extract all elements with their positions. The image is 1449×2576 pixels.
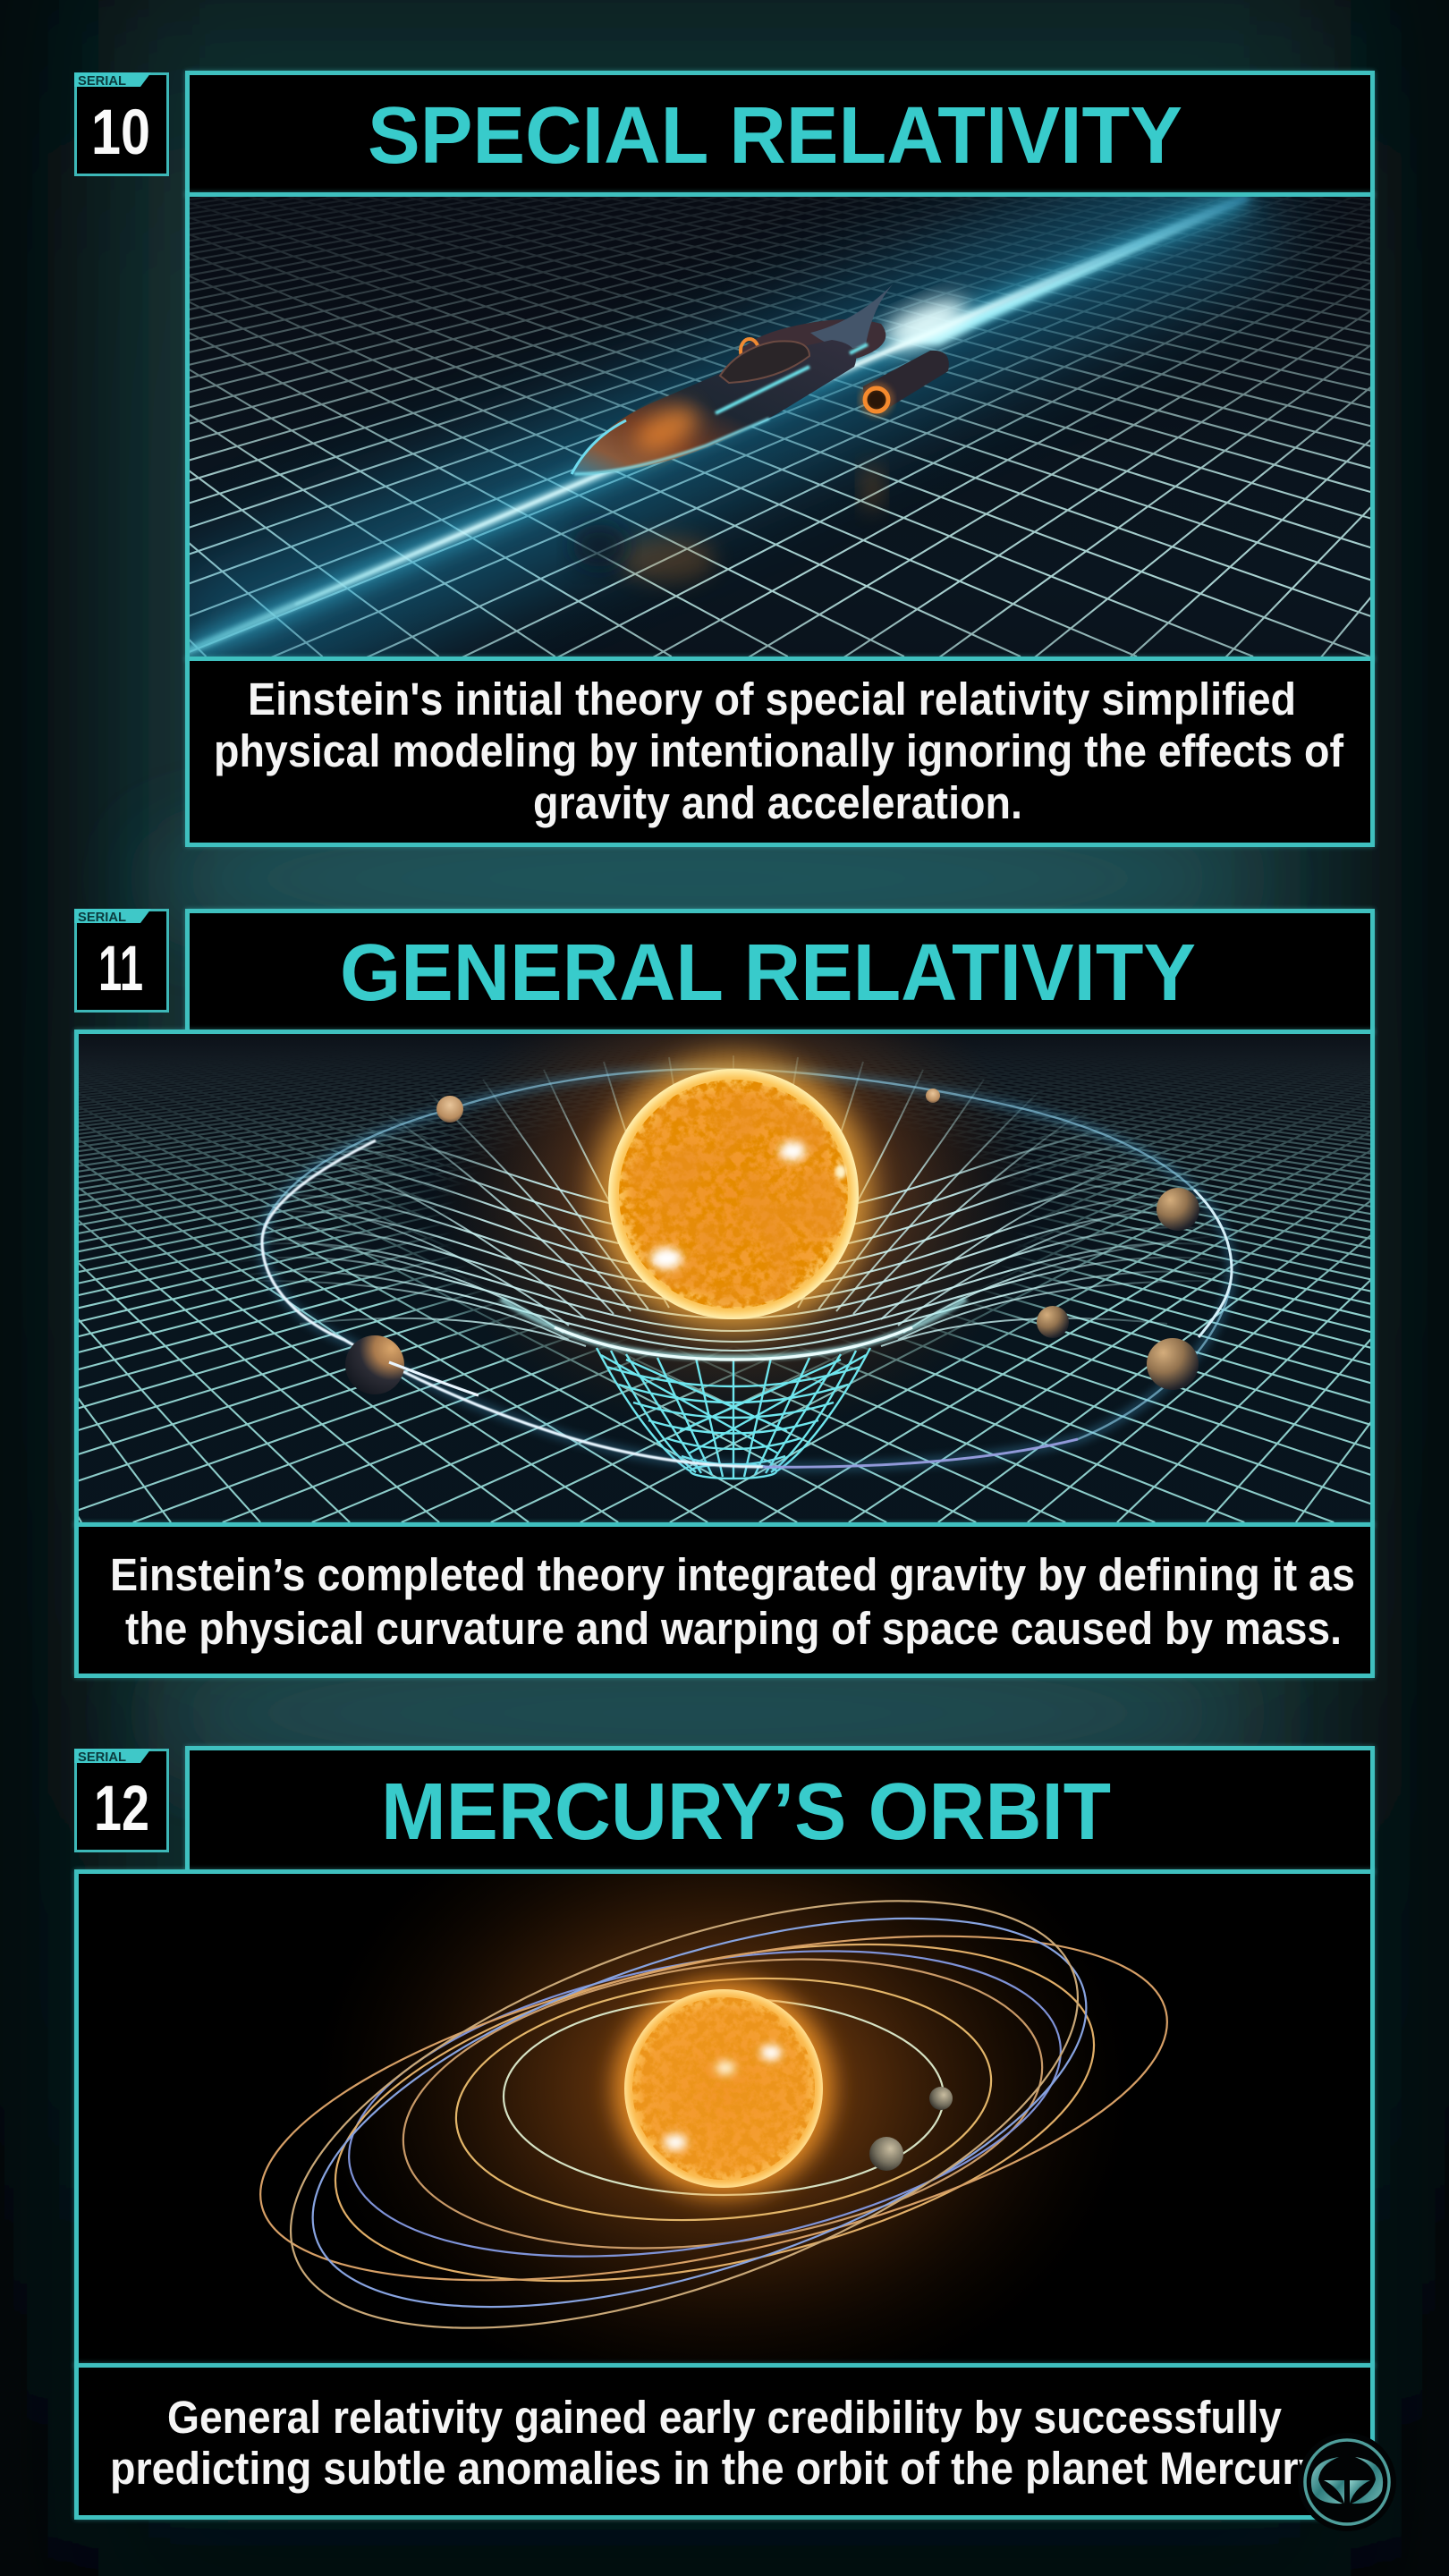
- illustration: spaceship on a grid: [185, 192, 1375, 661]
- serial badge 11: 11: [98, 934, 143, 1004]
- warm glow behind the sun: [429, 953, 1038, 1436]
- section 11: general relativity: [71, 906, 1378, 1681]
- nose glow: [628, 398, 705, 461]
- spaceship: [572, 284, 949, 474]
- cyan streak: [716, 344, 868, 413]
- orbit rings: [231, 1813, 1197, 2416]
- serial badge 11: [74, 909, 169, 1013]
- light beam, grid and ship: [190, 197, 1370, 657]
- funnel rim: [501, 1299, 966, 1358]
- beam: [183, 197, 1248, 653]
- serial badge 10: SERIAL: [78, 73, 126, 89]
- lower engine: [863, 351, 949, 410]
- planets: [345, 1089, 1199, 1395]
- heading: mercury's orbit: [185, 1746, 1375, 1874]
- upper pod: [741, 319, 886, 380]
- serial badge 10: [74, 72, 169, 176]
- heading: special relativity: [185, 71, 1375, 197]
- section 12: mercury's orbit: [71, 1743, 1378, 2522]
- caption: general relativity: [74, 1522, 1375, 1678]
- radial curves: [233, 1055, 1234, 1346]
- caption: special relativity: Einstein's initial theory of special relativity simplified: [248, 674, 1296, 724]
- logo badge: [1301, 2438, 1396, 2531]
- sun: [614, 1979, 833, 2198]
- warp curves: [233, 1123, 1234, 1351]
- serial badge 12: SERIAL: [78, 1750, 126, 1765]
- amber glow: [312, 1767, 1135, 2411]
- fin: [810, 284, 893, 348]
- serial badge 12: [74, 1749, 169, 1852]
- heading: general relativity: GENERAL RELATIVITY: [340, 928, 1196, 1018]
- perspective grid: [79, 1039, 1370, 1522]
- heading: special relativity: SPECIAL RELATIVITY: [368, 91, 1182, 181]
- caption: special relativity: [185, 657, 1375, 847]
- perspective grid: [0, 0, 1449, 659]
- grid fade: [79, 1034, 1370, 1522]
- section 10: special relativity: [74, 68, 1378, 850]
- orbit ring: [262, 1069, 1232, 1467]
- grid fade: [190, 197, 1370, 657]
- heading: mercury's orbit: MERCURY’S ORBIT: [381, 1767, 1111, 1857]
- sun: [595, 1055, 872, 1333]
- caption: special relativity: gravity and acceleration.: [533, 777, 1022, 828]
- cockpit: [720, 341, 809, 383]
- illustration: curved spacetime around the sun: [74, 1030, 1375, 1527]
- beam haze: [179, 192, 1252, 657]
- grid, sun, orbit and funnel: [79, 1034, 1370, 1522]
- reflection on grid: [572, 462, 883, 582]
- serial badge 11: SERIAL: [78, 910, 126, 925]
- serial badge 10: 10: [91, 97, 150, 168]
- caption: mercury's orbit: General relativity gained early credibility by successfully: [167, 2392, 1283, 2443]
- gravity funnel: [501, 1299, 966, 1479]
- serial badge 12: 12: [94, 1774, 149, 1844]
- caption: mercury's orbit: [74, 2363, 1375, 2520]
- illustration: precessing orbits around the sun: [74, 1869, 1375, 2368]
- planets: [869, 2087, 953, 2171]
- heading: general relativity: [185, 909, 1375, 1034]
- hull: [572, 340, 856, 474]
